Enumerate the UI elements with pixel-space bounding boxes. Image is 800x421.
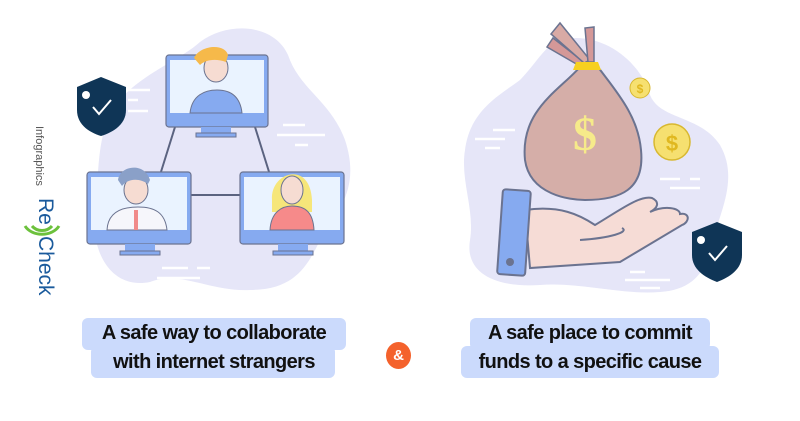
icon: shield right	[692, 222, 742, 282]
ampersand badge: &	[393, 347, 404, 364]
blob left	[94, 28, 350, 290]
coins: $	[666, 131, 678, 156]
caption left: A safe way to collaborate	[102, 322, 326, 344]
coins: $	[637, 82, 644, 96]
monitor top	[166, 47, 268, 137]
logo: Infographics: Infographics	[33, 126, 45, 186]
money bag	[525, 23, 641, 200]
monitor left	[87, 168, 191, 255]
caption right	[461, 318, 719, 378]
network lines	[160, 127, 270, 195]
logo: ReCheck	[24, 198, 60, 296]
hand	[497, 189, 688, 276]
ampersand badge	[386, 342, 411, 369]
blob right	[464, 38, 728, 292]
logo: ReCheck: Re	[34, 198, 57, 225]
icon: shield left	[77, 77, 126, 136]
logo: ReCheck: Check	[34, 236, 57, 296]
decorative dashes	[128, 90, 325, 278]
monitor right	[240, 172, 344, 255]
caption left: with internet strangers	[113, 351, 315, 373]
money bag: $	[573, 108, 597, 161]
caption left	[82, 318, 346, 378]
caption right: funds to a specific cause	[479, 351, 701, 373]
caption right: A safe place to commit	[488, 322, 692, 344]
coins	[630, 78, 690, 160]
